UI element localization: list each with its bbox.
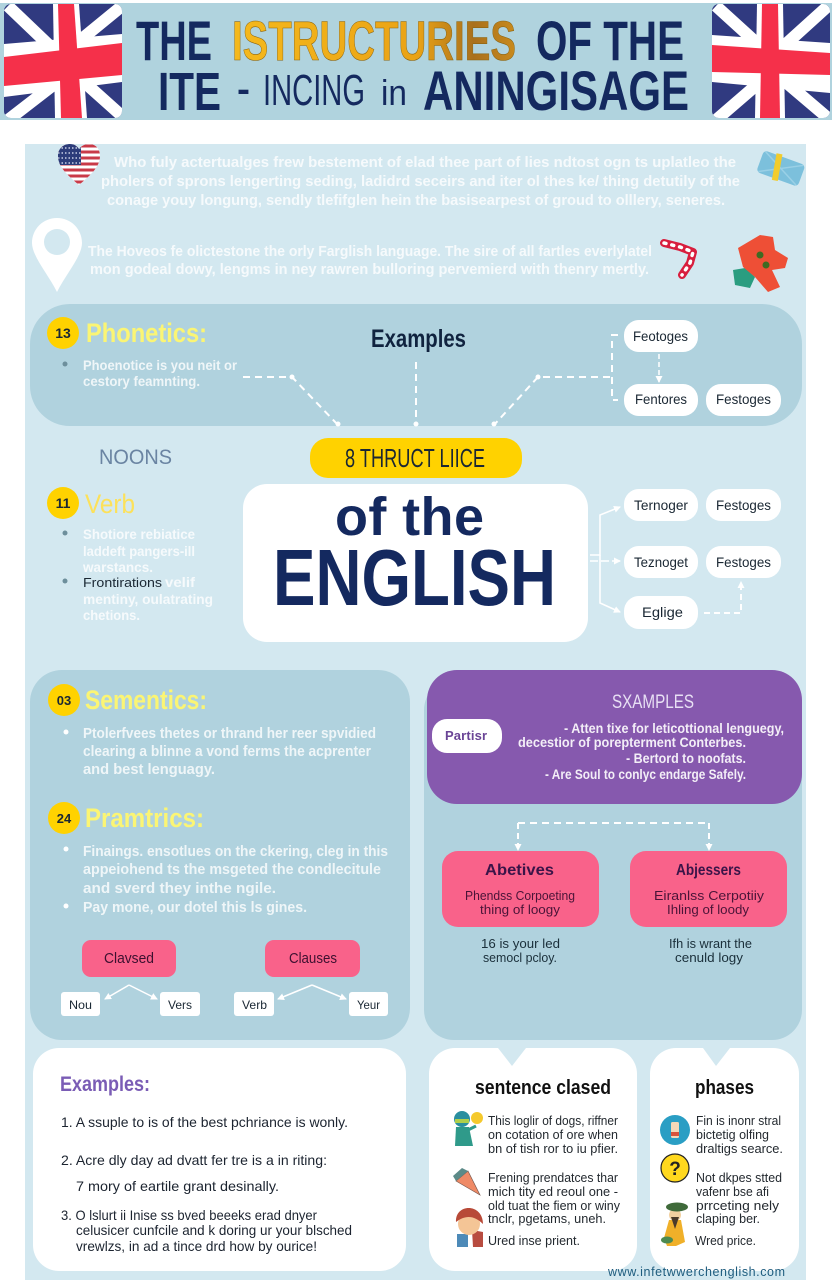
- connector arrow: feotoges to fentores: [658, 354, 660, 382]
- bullet list: verb: warstancs.: [82, 559, 153, 575]
- text: semantics: clearing a blinne a vond ferms the acprenter: [83, 744, 371, 760]
- intro paragraph 1: conage youy longung, sendly tlefifglen hein the basisearpest of groud to olllery, seneres.: [107, 192, 725, 209]
- text: pragmatics: and sverd they inthe ngile.: [83, 881, 276, 897]
- icon: bearded man: [661, 1202, 688, 1246]
- title line 2: INCING: [263, 66, 365, 115]
- icon: blue circle: [660, 1115, 690, 1145]
- badge: 24: 24: [57, 811, 72, 826]
- intro paragraph 1: Who fuly actertualges frew bestement of elad thee part of lies ndtost ogn ts uplatleo the: [114, 154, 736, 171]
- purple examples box: decestior of porepterment Conterbes.: [518, 735, 746, 750]
- label: noons: NOONS: [99, 446, 172, 469]
- title line 2: -: [237, 68, 250, 109]
- card: numbered examples: Examples:: [60, 1073, 150, 1096]
- icon: UK flag right: [712, 4, 830, 120]
- pill: ternoger: Ternoger: [634, 497, 688, 513]
- card: numbered examples: 7 mory of eartile grant desinally.: [76, 1178, 279, 1194]
- connectors: english card to pills: [590, 507, 741, 613]
- title line 2: ANINGISAGE: [423, 59, 689, 122]
- text: pragmatics: [64, 844, 388, 916]
- bullet list: verb: mentiny, oulatrating: [83, 591, 213, 607]
- text: sentence clause items: This loglir of dogs, riffner: [488, 1113, 619, 1128]
- clause diagram left: [61, 940, 200, 1016]
- card: abjessers: Abjessers: [676, 862, 741, 879]
- panel: parts of speech: [424, 670, 802, 1040]
- website url: www.infetwwerchenglish.com: [607, 1265, 785, 1279]
- purple examples box: - Bertord to noofats.: [626, 751, 746, 766]
- panel: verb: [47, 487, 213, 623]
- title line 1: OF THE: [536, 9, 684, 72]
- purple examples box: [427, 670, 802, 804]
- caption: abjessers: cenuld logy: [675, 950, 744, 965]
- card: numbered examples: 3. O lslurt ii Inise ss bved beeeks erad dnyer: [61, 1207, 317, 1223]
- intro paragraph 1: [101, 154, 740, 209]
- heading: pragmatics: Pramtrics:: [85, 803, 204, 833]
- text: phases items: bictetig olfing: [696, 1127, 769, 1142]
- bullet list: verb: Frontirations: [83, 575, 163, 590]
- title line 2: in: [381, 72, 407, 113]
- card: numbered examples: 2. Acre dly day ad dvatt fer tre is a in riting:: [61, 1152, 327, 1168]
- icon: green figure: [454, 1111, 483, 1146]
- heading: phonetics: Phonetics:: [86, 318, 207, 348]
- icon: location pin: [32, 218, 82, 292]
- caption: abetives: [481, 936, 560, 965]
- card: abjessers: Ihling of loody: [667, 902, 749, 917]
- text: pragmatics: Finaings. ensotlues on the ckering, cleg in this: [83, 844, 388, 860]
- pill: fentores: [624, 384, 698, 416]
- pill: festoges: Festoges: [716, 391, 771, 407]
- icon: puzzle pieces: [733, 235, 788, 292]
- clause diagram left: Clavsed: [104, 951, 154, 967]
- badge: 11: 11: [56, 495, 71, 511]
- pill: fentores: Fentores: [635, 391, 687, 407]
- card: phases: [650, 1048, 799, 1271]
- text: phases items: Not dkpes stted: [696, 1170, 782, 1185]
- caption: abjessers: Ifh is wrant the: [669, 936, 752, 951]
- banner: structure pill: [310, 438, 522, 478]
- icon: question mark: [661, 1154, 689, 1182]
- heading: semantics: Sementics:: [85, 685, 207, 715]
- pill: feotoges: [624, 320, 698, 352]
- badge: 03: 03: [57, 693, 71, 708]
- text: sentence clause items: on cotation of ore when: [488, 1127, 618, 1142]
- clause diagram right: [234, 940, 388, 1016]
- text: semantics: [64, 726, 376, 778]
- text: pragmatics: Pay mone, our dotel this ls gines.: [83, 900, 307, 916]
- title line 1: ISTRUCTURIES: [232, 9, 516, 72]
- connector: dashed split: [518, 823, 709, 850]
- text: phases items: Wred price.: [695, 1233, 756, 1248]
- pill: teznoget: [624, 546, 698, 578]
- text: sentence clause items: old tuat the fiem or winy: [488, 1198, 620, 1213]
- clause diagram right: Clauses: [289, 951, 337, 967]
- pill: teznoget: Teznoget: [634, 554, 688, 570]
- purple examples box: - Are Soul to conlyc endarge Safely.: [545, 767, 746, 782]
- pill: eglige: [624, 596, 698, 629]
- text: semantics: Ptolerfvees thetes or thrand her reer spvidied: [83, 726, 376, 742]
- title line 2: [158, 59, 689, 122]
- text: phases items: prrceting nely: [696, 1198, 780, 1213]
- badge: 11: [47, 487, 79, 519]
- pill: eglige: Eglige: [642, 604, 683, 620]
- badge: 24: [48, 802, 80, 834]
- pill: ternoger: [624, 489, 698, 521]
- icon: blue parcel: [755, 148, 806, 189]
- text: semantics: and best lenguagy.: [83, 762, 215, 778]
- icon: crayon: [453, 1168, 480, 1195]
- card: abetives: Abetives: [485, 862, 554, 879]
- text: phases items: vafenr bse afi: [696, 1184, 769, 1199]
- text: phases items: [695, 1113, 783, 1248]
- card: sentence clauses: [429, 1048, 637, 1271]
- heading: verb: Verb: [85, 489, 135, 519]
- card: abjessers: Eiranlss Cerpotiiy: [654, 888, 765, 903]
- bullet text: phonetics: [62, 357, 238, 389]
- badge: 13: [47, 317, 79, 349]
- purple examples box: SXAMPLES: [612, 692, 694, 713]
- text: phases items: Fin is inonr stral: [696, 1113, 781, 1128]
- icon: question mark: ?: [669, 1159, 681, 1180]
- icon: candy cane: [664, 243, 693, 275]
- purple examples box: - Atten tixe for leticottional lenguegy,: [564, 721, 784, 736]
- title line 2: ITE: [158, 62, 221, 122]
- intro paragraph 2: The Hoveos fe olictestone the orly Farglish language. The sire of all fartles everlylatel: [88, 243, 652, 260]
- bullet text: phonetics: cestory feamnting.: [83, 373, 200, 389]
- pill: festoges: [706, 384, 781, 416]
- icon: US flag heart: [58, 144, 100, 185]
- heading: examples: Examples: [371, 325, 466, 353]
- caption: abetives: 16 is your led: [481, 936, 560, 951]
- card: numbered examples: vrewlzs, in ad a tince drd how by ourice!: [76, 1238, 317, 1254]
- bullet list: verb: laddeft pangers-ill: [83, 543, 195, 559]
- intro paragraph 2: mon godeal dowy, lengms in ney rawren bulloring pervemierd with thenry mertly.: [90, 261, 649, 278]
- text: phases items: claping ber.: [696, 1211, 760, 1226]
- central title card: [243, 484, 588, 642]
- card: abjessers: [630, 851, 787, 927]
- pill: partisr: Partisr: [445, 728, 487, 743]
- bullet text: phonetics: Phoenotice is you neit or: [83, 357, 238, 373]
- card: abetives: thing of loogy: [480, 902, 561, 917]
- text: sentence clause items: mich tity ed reoul one -: [488, 1184, 618, 1199]
- card: phases: phases: [695, 1077, 754, 1099]
- caption: abjessers: [669, 936, 752, 965]
- header banner: [0, 3, 832, 122]
- card: abetives: Phendss Corpoeting: [465, 888, 575, 903]
- text: sentence clause items: bn of tish ror to iu pfier.: [488, 1141, 618, 1156]
- bullet list: verb: velif: [165, 574, 195, 590]
- badge: 13: 13: [55, 325, 71, 341]
- pill: festoges row 2: [706, 546, 781, 578]
- clause diagram right: Yeur: [357, 998, 380, 1012]
- intro paragraph 2: [88, 243, 652, 278]
- intro paragraph 1: pholers of sprons lengerting seding, ladidrd seceirs and iter ol thes ke/ thing detutily of the: [101, 173, 740, 190]
- banner: structure pill: 8 THRUCT LIICE: [345, 443, 485, 473]
- badge: 03: [48, 684, 80, 716]
- card: sentence clauses: sentence clased: [475, 1077, 611, 1099]
- card: abetives: [442, 851, 599, 927]
- icon: UK flag left: [4, 4, 122, 120]
- text: sentence clause items: [488, 1113, 620, 1248]
- caption: abetives: semocl pcloy.: [483, 950, 557, 965]
- title line 1: THE: [136, 9, 212, 72]
- panel: semantics and pragmatics: [30, 670, 410, 1040]
- connectors: dashed lines to centre: [243, 335, 618, 426]
- clause diagram right: Verb: [242, 998, 267, 1012]
- pill: partisr: [432, 719, 502, 753]
- clause diagram left: Vers: [168, 998, 192, 1012]
- text: sentence clause items: tnclr, pgetams, uneh.: [488, 1211, 606, 1226]
- text: phases items: draltigs searce.: [696, 1141, 783, 1156]
- clause diagram left: Nou: [69, 998, 92, 1012]
- pill: festoges row 2: Festoges: [716, 554, 771, 570]
- pill: festoges row 1: [706, 489, 781, 521]
- text: sentence clause items: Frening prendatces thar: [488, 1170, 619, 1185]
- card: numbered examples: 1. A ssuple to is of the best pchriance is wonly.: [61, 1114, 348, 1130]
- pill: festoges row 1: Festoges: [716, 497, 771, 513]
- panel: phonetics: [30, 304, 802, 426]
- pill: feotoges: Feotoges: [633, 328, 688, 344]
- card: numbered examples: celusicer cunfcile and k doring ur your blsched: [76, 1222, 352, 1238]
- text: pragmatics: appeiohend ts the msgeted the condlecitule: [83, 862, 381, 878]
- central title card: of the: [335, 487, 484, 547]
- bullet list: verb: chetions.: [83, 607, 140, 623]
- text: sentence clause items: Ured inse prient.: [488, 1233, 580, 1248]
- card: numbered examples: [33, 1048, 406, 1271]
- icon: red hat child: [456, 1208, 483, 1247]
- central title card: ENGLISH: [273, 533, 556, 622]
- bullet list: verb: Shotiore rebiatice: [83, 526, 195, 542]
- bullet list: verb: [62, 526, 213, 623]
